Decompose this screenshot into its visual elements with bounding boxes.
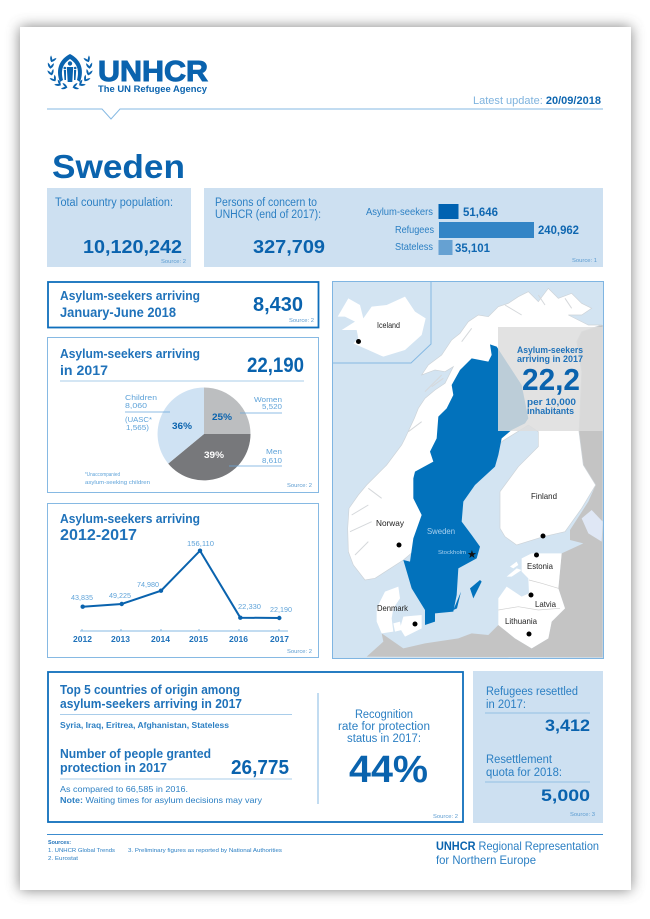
- map labels and capitals: Estonia: [527, 561, 553, 571]
- callout: arrivals per 10,000 inhabitants: 22,2: [522, 362, 580, 397]
- panel: countries of origin, protection and recognition rate: As compared to 66,585 in 2016.: [60, 784, 188, 794]
- panel: resettlement: 3,412: [545, 716, 590, 735]
- sources: [48, 840, 282, 862]
- panel: resettlement: Source: 3: [570, 812, 595, 818]
- panel: arrivals 2012-2017: Asylum-seekers arriving: [60, 511, 200, 526]
- panel: resettlement: Resettlement: [486, 754, 553, 766]
- panel: arrivals in 2017: [48, 338, 318, 492]
- map labels and capitals: Stockholm: [438, 550, 466, 556]
- panel: arrivals 2012-2017: [48, 504, 318, 658]
- footer: regional representation: for Northern Europe: [436, 853, 536, 867]
- Belarus / Russia pale area: [582, 510, 603, 542]
- Gotland: [470, 580, 482, 598]
- panel: arrivals January-June 2018: [48, 282, 318, 328]
- pie chart: 39%: [204, 450, 225, 461]
- map labels and capitals: Iceland: [377, 320, 400, 330]
- callout: arrivals per 10,000 inhabitants: inhabitants: [527, 406, 574, 417]
- pie legend: Men: [266, 447, 282, 456]
- recognition rate: Recognition: [355, 709, 413, 721]
- panel: countries of origin, protection and recognition rate: Number of people granted: [60, 746, 211, 761]
- bar chart: persons of concern: 240,962: [538, 223, 579, 237]
- panel: countries of origin, protection and recognition rate: protection in 2017: [60, 760, 167, 775]
- map panel: [332, 282, 604, 658]
- panel: resettlement: [473, 671, 603, 823]
- panel: resettlement: Refugees resettled: [486, 686, 578, 698]
- line chart: 2013: [111, 634, 130, 644]
- map labels and capitals: Denmark: [377, 603, 409, 613]
- pie legend: 5,520: [262, 402, 282, 411]
- Estonian islands: [507, 568, 522, 577]
- pie legend: (UASC*: [125, 415, 152, 424]
- line chart: 156,110: [187, 539, 214, 548]
- map labels and capitals: Norway: [376, 518, 405, 528]
- panel: countries of origin, protection and recognition rate: Note: Waiting times for asylum decisions may vary: [60, 795, 263, 805]
- pie legend: Children: [125, 393, 157, 402]
- footer: regional representation: [436, 839, 599, 867]
- callout: arrivals per 10,000 inhabitants: arriving in 2017: [517, 354, 583, 365]
- map labels and capitals: ★: [467, 549, 477, 561]
- sources: Sources:: [48, 840, 71, 846]
- line chart: 2014: [151, 634, 170, 644]
- Oland: [453, 592, 461, 610]
- icon: laurel wreath and sheltering hands: [47, 54, 93, 90]
- line chart: 74,980: [137, 580, 159, 589]
- line chart: 22,190: [270, 605, 292, 614]
- Denmark: [377, 587, 400, 633]
- bar chart: persons of concern: Stateless: [395, 241, 433, 253]
- bar chart: persons of concern: [366, 204, 579, 255]
- panel: persons of concern: UNHCR (end of 2017):: [215, 209, 321, 221]
- line chart: 2012: [73, 634, 92, 644]
- recognition rate: rate for protection: [338, 721, 430, 733]
- map labels and capitals: [356, 320, 557, 636]
- panel: countries of origin, protection and recognition rate: 26,775: [231, 757, 289, 779]
- Baltic borders: [498, 580, 560, 610]
- line chart: 2017: [270, 634, 289, 644]
- bar chart: persons of concern: 35,101: [455, 241, 490, 255]
- panel: arrivals in 2017: asylum-seeking children: [85, 480, 150, 486]
- panel: total country population: [47, 188, 191, 267]
- panel: resettlement: in 2017:: [486, 699, 526, 711]
- panel: arrivals January-June 2018: Asylum-seekers arriving: [60, 288, 200, 303]
- map labels and capitals: Sweden: [427, 526, 455, 536]
- panel: total country population: Source: 2: [161, 259, 186, 265]
- recognition rate: status in 2017:: [347, 733, 421, 745]
- map labels and capitals: Finland: [531, 491, 557, 501]
- panel: arrivals 2012-2017: Source: 2: [287, 649, 312, 655]
- fjord texture: [350, 295, 572, 555]
- panel: arrivals January-June 2018: January-June 2018: [60, 305, 176, 320]
- title: Sweden: [52, 148, 185, 185]
- panel: arrivals in 2017: in 2017: [60, 362, 108, 378]
- map labels and capitals: Lithuania: [505, 616, 537, 626]
- map labels and capitals: Latvia: [535, 599, 556, 609]
- panel: arrivals in 2017: Source: 2: [287, 483, 312, 489]
- pie chart: [158, 388, 250, 480]
- line chart: 49,225: [109, 591, 131, 600]
- pie legend: 8,610: [262, 456, 282, 465]
- bar chart: persons of concern: 51,646: [463, 205, 498, 219]
- panel: arrivals in 2017: *Unaccompanied: [85, 472, 120, 478]
- callout: arrivals per 10,000 inhabitants: [498, 327, 603, 431]
- bar chart: persons of concern: Refugees: [395, 224, 434, 236]
- pie legend: 1,565): [126, 423, 150, 432]
- panel: arrivals in 2017: Asylum-seekers arriving: [60, 346, 200, 361]
- panel: countries of origin, protection and recognition rate: Top 5 countries of origin among: [60, 683, 240, 697]
- panel: resettlement: quota for 2018:: [486, 767, 562, 779]
- panel: countries of origin, protection and recognition rate: [48, 672, 463, 822]
- panel: arrivals January-June 2018: Source: 2: [289, 318, 314, 324]
- bar chart: persons of concern: Asylum-seekers: [366, 206, 433, 218]
- Norway, northern Sweden and Finland: [348, 288, 602, 580]
- footer: regional representation: UNHCR Regional Representation: [436, 839, 599, 853]
- panel: persons of concern: [204, 188, 603, 267]
- panel: persons of concern: Persons of concern to: [215, 197, 317, 209]
- callout: arrivals per 10,000 inhabitants: per 10,000: [527, 397, 576, 408]
- panel: persons of concern: Source: 1: [572, 258, 597, 264]
- pie legend: Women: [254, 395, 282, 404]
- panel: arrivals 2012-2017: 2012-2017: [60, 527, 137, 544]
- Russia, Baltic hinterland and central Europe: [367, 325, 603, 657]
- UNHCR logo: [47, 54, 208, 95]
- panel: total country population: 10,120,242: [83, 236, 182, 257]
- panel: countries of origin, protection and recognition rate: asylum-seekers arriving in 2017: [60, 697, 242, 711]
- line chart: 22,330: [238, 602, 261, 611]
- panel: countries of origin, protection and recognition rate: Source: 2: [433, 814, 458, 820]
- pie legend: 8,060: [125, 401, 147, 410]
- line chart: 2016: [229, 634, 248, 644]
- sources: 3. Preliminary figures as reported by National Authorities: [128, 848, 282, 854]
- Iceland: [338, 297, 426, 357]
- panel: arrivals January-June 2018: 8,430: [253, 294, 303, 316]
- line chart: [71, 539, 292, 644]
- pie legend: [125, 393, 282, 466]
- line chart: 43,835: [71, 593, 93, 602]
- callout: arrivals per 10,000 inhabitants: Asylum-seekers: [517, 345, 583, 356]
- panel: persons of concern: 327,709: [253, 236, 325, 257]
- sources: 1. UNHCR Global Trends: [48, 848, 115, 854]
- pie chart: 36%: [172, 421, 193, 432]
- footer rule: [47, 834, 603, 836]
- Baltic states: [498, 553, 565, 648]
- pie chart: 25%: [212, 412, 233, 423]
- map: land: [338, 288, 603, 657]
- UNHCR logo: The UN Refugee Agency: [98, 84, 208, 95]
- line chart: 2015: [189, 634, 208, 644]
- header rule with notch: [47, 109, 603, 119]
- recognition rate: 44%: [349, 749, 428, 791]
- panel: total country population: Total country population:: [55, 197, 173, 209]
- Iceland inset frame: [333, 282, 431, 363]
- panel: arrivals in 2017: 22,190: [247, 354, 304, 377]
- recognition rate: [338, 709, 430, 791]
- latest update: Latest update: 20/09/2018: [473, 95, 601, 107]
- sources: 2. Eurostat: [48, 856, 79, 862]
- panel: countries of origin, protection and recognition rate: Syria, Iraq, Eritrea, Afghanistan, Stateless: [60, 720, 229, 730]
- panel: resettlement: 5,000: [541, 786, 590, 805]
- Sweden: [403, 344, 528, 625]
- UNHCR logo: UNHCR: [98, 56, 208, 88]
